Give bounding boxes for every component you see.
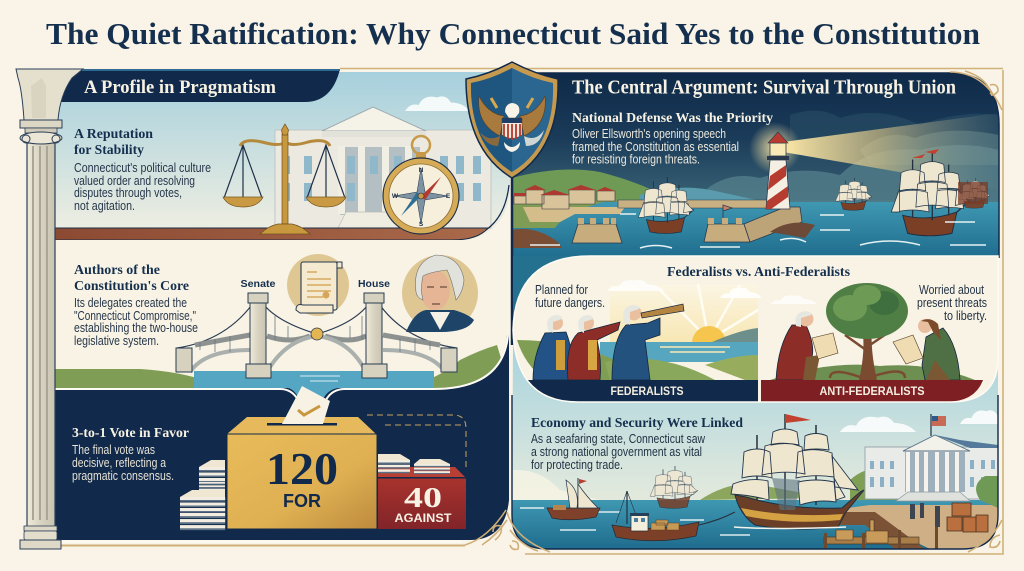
text block: authors of the constitution's core: "Connecticut Compromise," (74, 309, 196, 323)
against box (378, 467, 466, 529)
text block: economy and security: for protecting trade. (531, 458, 623, 472)
federalists banner: FEDERALISTS (610, 384, 684, 398)
icon: compass: S (419, 221, 424, 228)
flagship (731, 414, 864, 529)
anti-federalist view: present threats (917, 296, 987, 310)
stacked crates (947, 503, 988, 532)
text block: authors of the constitution's core (74, 263, 198, 348)
icon: eagle shield (466, 62, 558, 178)
anti-federalist view (917, 283, 987, 323)
text block: national defense: National Defense Was the Priority (572, 111, 773, 126)
text block: authors of the constitution's core: Constitution's Core (74, 279, 189, 294)
text block: authors of the constitution's core: Authors of the (74, 263, 160, 278)
water notch under bridge (288, 388, 338, 402)
harbor ship (638, 177, 694, 234)
text block: authors of the constitution's core: Its delegates created the (74, 296, 187, 310)
dashed line to against box (367, 415, 466, 470)
title: The Quiet Ratification: Why Connecticut Said Yes to the Constitution (46, 16, 980, 51)
text block: a reputation for stability: for Stability (74, 143, 144, 158)
panel: the central argument (465, 62, 1013, 554)
tugboat (612, 491, 735, 541)
enemy fleet (836, 149, 990, 236)
text block: a reputation for stability: disputes through votes, (74, 186, 182, 200)
federalists banner (520, 380, 758, 402)
eagle (479, 96, 545, 152)
text block: economy and security: a strong national government as vital (531, 445, 702, 459)
senate and house labels (240, 278, 390, 290)
icon: compass: N (419, 167, 424, 174)
lighthouse (766, 132, 790, 209)
heading: A Profile in Pragmatism (84, 78, 277, 98)
text block: a reputation for stability: not agitation. (74, 199, 135, 213)
text block: 3-to-1 vote: decisive, reflecting a (72, 456, 166, 470)
federalist view: Planned for (535, 283, 588, 297)
reputation scene: sky, capitol, scales, compass (54, 72, 510, 240)
far merchant ship (650, 466, 698, 508)
icon: compass (383, 136, 459, 234)
panel: federalists vs anti-federalists (512, 256, 998, 402)
text block: economy and security: Economy and Security Were Linked (531, 416, 743, 431)
text block: 3-to-1 vote: pragmatic consensus. (72, 469, 174, 483)
anti-federalist view: Worried about (919, 283, 984, 297)
dock and shore (846, 505, 998, 548)
panel header banner (55, 69, 340, 102)
text block: authors of the constitution's core: establishing the two-house (74, 321, 198, 335)
text block: a reputation for stability (74, 127, 211, 213)
text block: national defense (572, 111, 773, 166)
storm clouds (790, 110, 998, 140)
senate and house labels: Senate (240, 278, 276, 290)
text block: economy and security: As a seafaring state, Connecticut saw (531, 432, 706, 446)
for box (227, 386, 377, 529)
merchant sailboat (547, 478, 600, 520)
capitol building (275, 107, 491, 228)
senate and house labels: House (358, 278, 390, 290)
federalist figures (533, 304, 684, 380)
text block: national defense: framed the Constitution as essential (572, 140, 739, 154)
wooden shelf (54, 228, 488, 240)
compromise scene: cream background, bridge, scroll, portrait (54, 240, 510, 402)
federalists scene (512, 280, 762, 380)
harbor forts (572, 205, 815, 243)
federalist view: future dangers. (535, 296, 605, 310)
section heading: Federalists vs. Anti-Federalists (667, 264, 850, 279)
economy scene backdrop and harbor (512, 70, 1013, 554)
text block: national defense: for resisting foreign threats. (572, 152, 700, 166)
text block: a reputation for stability: valued order and resolving (74, 174, 195, 188)
distant hills (513, 170, 650, 202)
for box: FOR (283, 491, 321, 511)
frame right and bottom gold line (525, 70, 1003, 554)
ballot stacks, for (180, 460, 225, 530)
sea foam (530, 214, 986, 248)
text block: a reputation for stability: Connecticut's political culture (74, 161, 211, 175)
icon: balance scales (223, 124, 346, 234)
harbor scene (512, 73, 999, 345)
treasury building (865, 414, 998, 508)
ballot stacks, against (378, 454, 450, 474)
sea behind top-left corner of comparison panel (513, 256, 600, 340)
against box: AGAINST (394, 513, 452, 525)
against box: 40 (404, 483, 442, 514)
panel: a profile in pragmatism (54, 68, 1003, 546)
sky panel outline arc (452, 185, 509, 240)
anti-federalist view: to liberty. (944, 309, 987, 323)
chart: ballot box vote count (180, 386, 466, 530)
ballot paper (282, 386, 330, 424)
icon: compass: E (446, 193, 451, 200)
wharf with cargo (824, 520, 938, 549)
text block: national defense: Oliver Ellsworth's opening speech (572, 127, 726, 141)
federalist view (535, 283, 605, 310)
text block: 3-to-1 vote (72, 426, 189, 483)
anti-federalist figures (776, 311, 960, 380)
text block: economy and security (531, 416, 743, 472)
portrait medallion (402, 255, 478, 332)
greek column (16, 69, 83, 549)
connecticut compromise bridge (176, 293, 457, 378)
text block: 3-to-1 vote: The final vote was (72, 443, 155, 457)
scroll medallion (287, 254, 349, 316)
text block: a reputation for stability: A Reputation (74, 127, 153, 142)
anti-federalists banner: ANTI-FEDERALISTS (820, 384, 924, 398)
text block: authors of the constitution's core: legislative system. (74, 334, 159, 348)
town (514, 185, 615, 209)
icon: compass: W (392, 193, 399, 200)
anti-federalists banner (761, 380, 983, 402)
text block: 3-to-1 vote: 3-to-1 Vote in Favor (72, 426, 189, 441)
harbor wall (618, 200, 767, 208)
corner ornaments (465, 71, 1002, 552)
section heading: The Central Argument: Survival Through Union (572, 76, 956, 98)
for box: 120 (266, 443, 338, 494)
people on wharf (910, 503, 940, 527)
anti-federalists scene (770, 283, 975, 380)
